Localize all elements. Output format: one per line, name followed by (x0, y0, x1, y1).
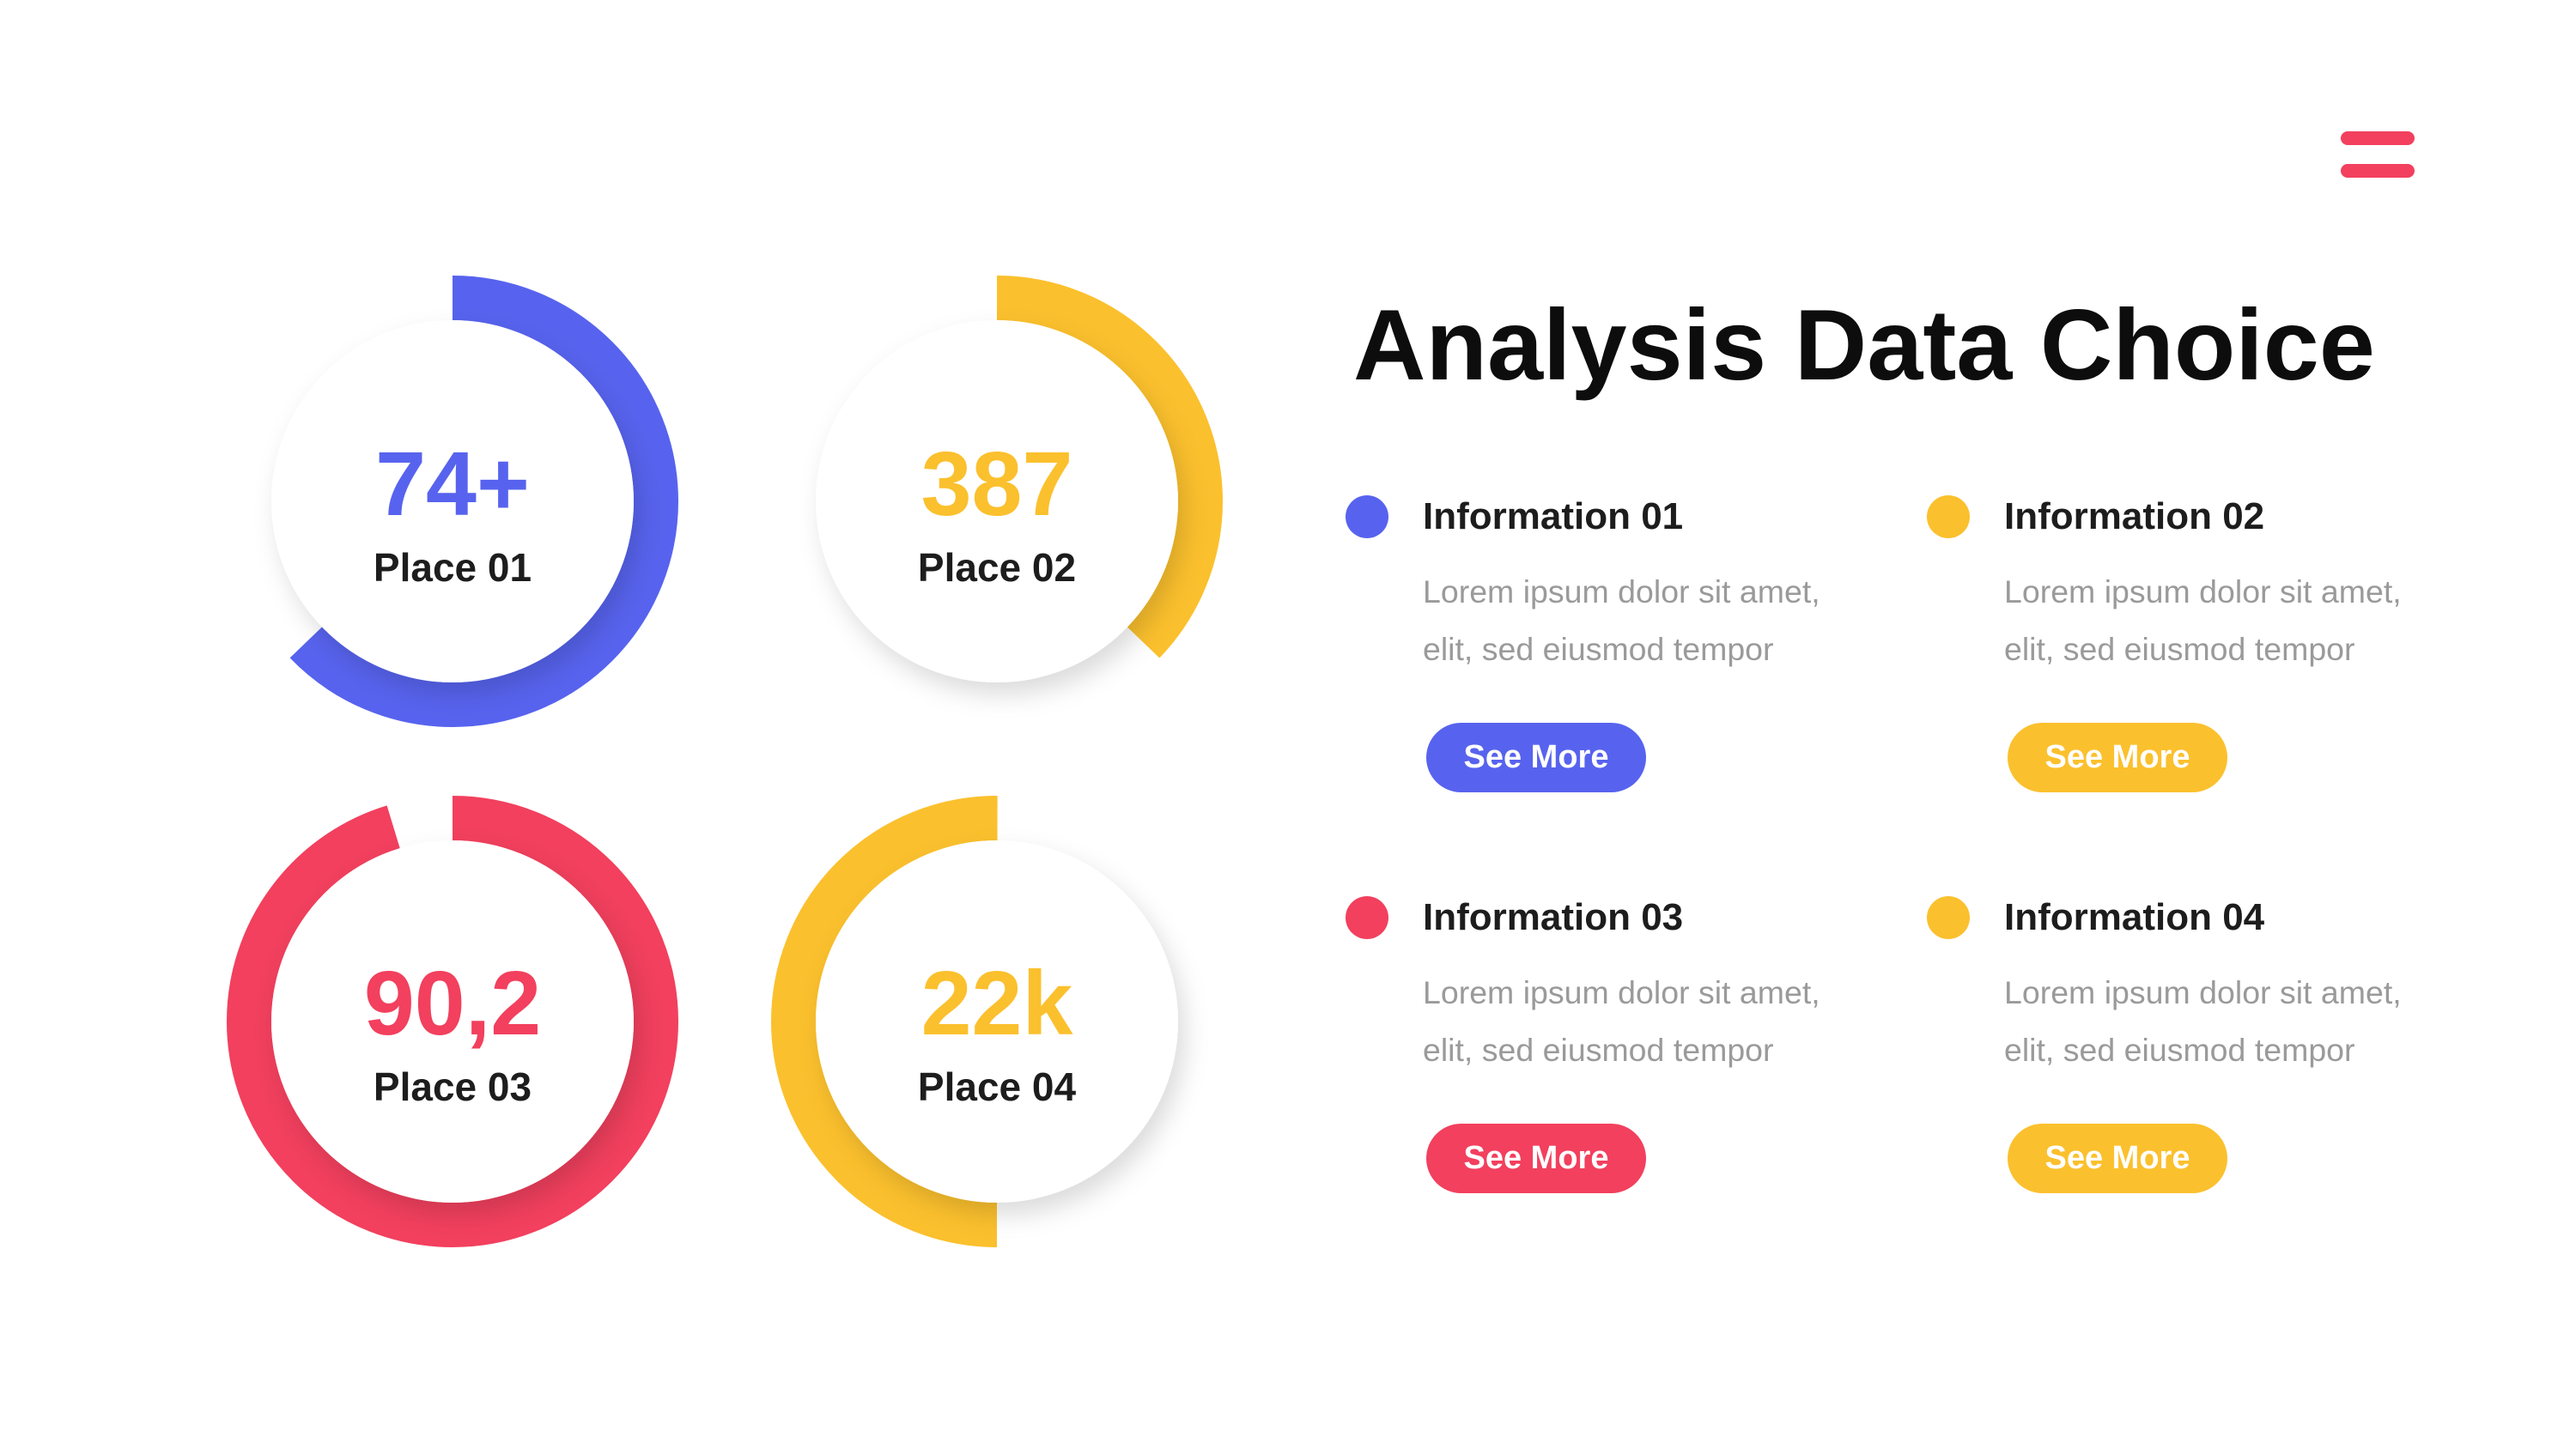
icon: hamburger menu (2341, 131, 2415, 178)
info block 01: Lorem ipsum dolor sit amet, (1423, 573, 1820, 609)
label: 74+ Place 01: 74+ (375, 433, 530, 535)
label: 74+ Place 01: Place 01 (374, 545, 532, 590)
info block 04: Information 04 (2004, 896, 2264, 938)
button: See More (1464, 1140, 1608, 1176)
info block 03 (1346, 896, 1820, 1193)
label: 90,2 Place 03 (364, 953, 541, 1109)
button (1426, 723, 1646, 792)
info block 02: Lorem ipsum dolor sit amet, (2004, 573, 2402, 609)
label: 90,2 Place 03: Place 03 (374, 1064, 532, 1109)
button (2008, 723, 2227, 792)
label: 22k Place 04 (918, 953, 1076, 1109)
label: 387 Place 02: Place 02 (918, 545, 1076, 590)
info block 03: Lorem ipsum dolor sit amet, (1423, 974, 1820, 1010)
info block 02 (1927, 495, 2402, 792)
donut: place 04 (793, 818, 1200, 1225)
button (1426, 1124, 1646, 1193)
title: Analysis Data Choice (1353, 288, 2375, 401)
info block 01: Information 01 (1423, 495, 1683, 537)
info block 04: elit, sed eiusmod tempor (2004, 1032, 2355, 1068)
button: See More (2045, 739, 2190, 775)
info block 02: elit, sed eiusmod tempor (2004, 631, 2355, 667)
label: 22k Place 04: 22k (921, 953, 1072, 1054)
label: 22k Place 04: Place 04 (918, 1064, 1076, 1109)
donut: place 03 (249, 818, 656, 1225)
info block 04: Lorem ipsum dolor sit amet, (2004, 974, 2402, 1010)
donut: place 01 (249, 298, 656, 705)
label: 387 Place 02 (918, 433, 1076, 590)
info block 02: Information 02 (2004, 495, 2264, 537)
label: 90,2 Place 03: 90,2 (364, 953, 541, 1054)
info block 03: elit, sed eiusmod tempor (1423, 1032, 1774, 1068)
donut: place 02 (793, 298, 1200, 705)
chart: donut rings (227, 276, 1223, 1247)
button: See More (2045, 1140, 2190, 1176)
info block 04 (1927, 896, 2402, 1193)
button: See More (1464, 739, 1608, 775)
info block 01 (1346, 495, 1820, 792)
label: 387 Place 02: 387 (921, 433, 1072, 535)
button (2008, 1124, 2227, 1193)
label: 74+ Place 01 (374, 433, 532, 590)
info block 03: Information 03 (1423, 896, 1683, 938)
info block 01: elit, sed eiusmod tempor (1423, 631, 1774, 667)
